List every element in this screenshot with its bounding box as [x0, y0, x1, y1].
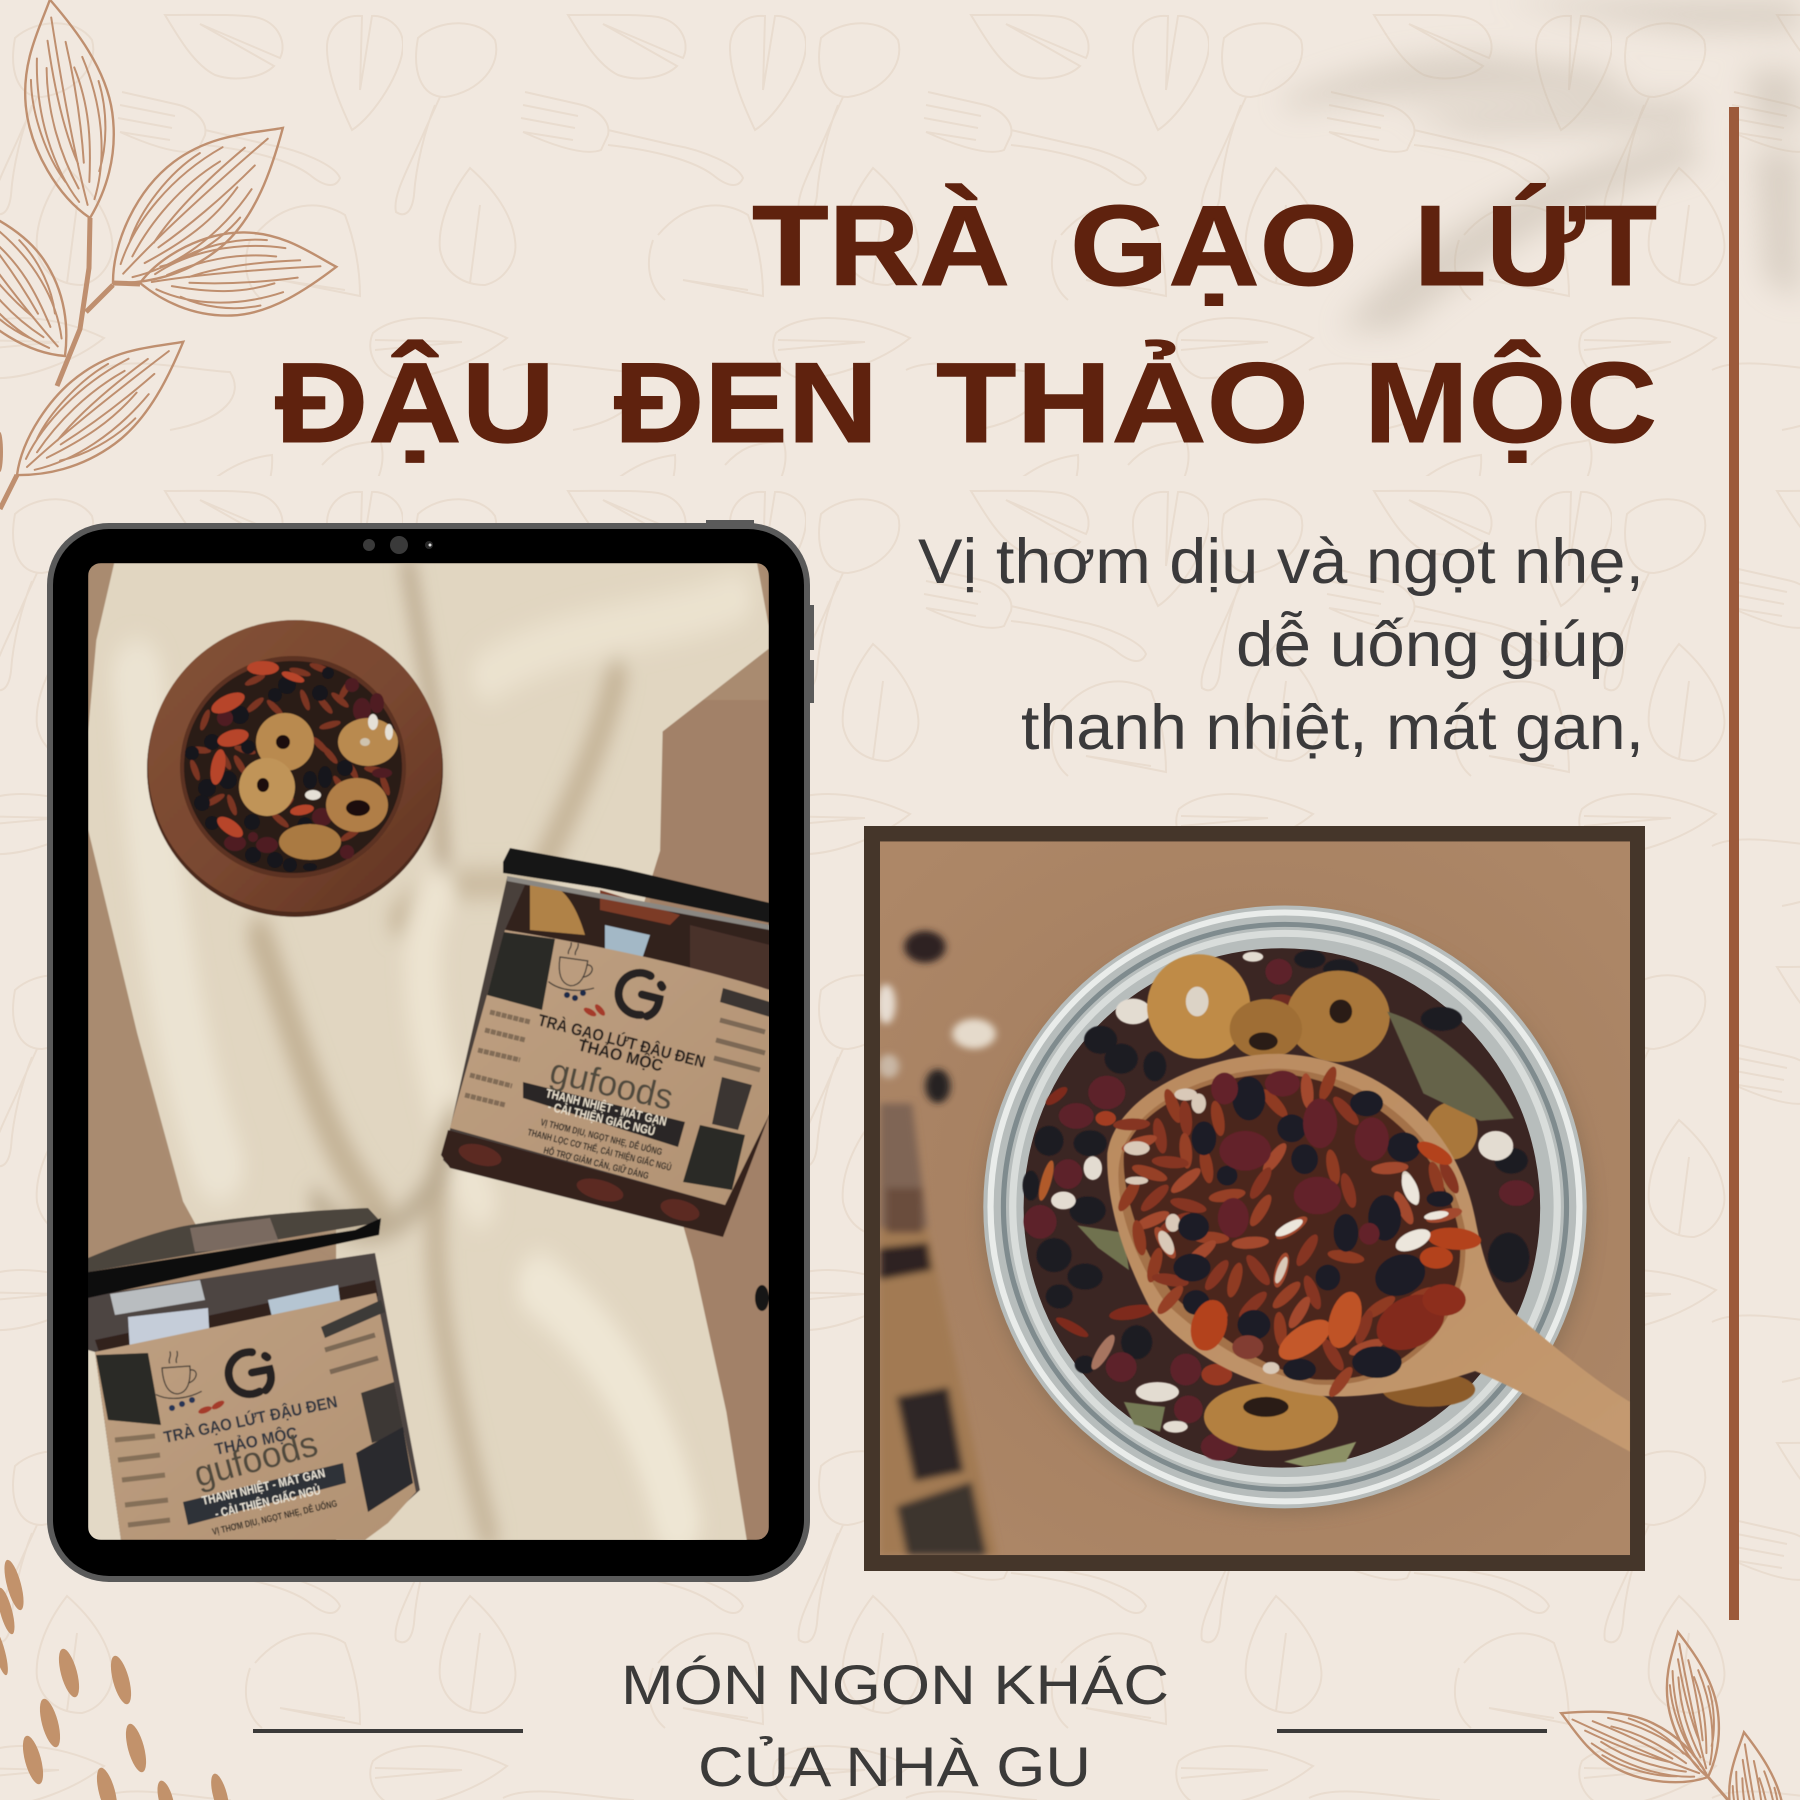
dried jujube slices [1147, 954, 1478, 1451]
footer heading: CỦA NHÀ GU [698, 1735, 1091, 1798]
title: LỨT [1414, 183, 1657, 310]
jar upper right: THẢO MỘC [576, 1035, 665, 1076]
jar lower left: gufoods [189, 1423, 322, 1495]
title: TRÀ [752, 183, 1010, 310]
jar upper right: - CẢI THIỆN GIẤC NGỦ [546, 1098, 657, 1139]
wooden bowl [147, 620, 443, 917]
blurred props left [877, 931, 997, 1555]
title: ĐẬU [275, 340, 555, 467]
shadow of leaves top right [1280, 0, 1800, 330]
vertical accent line [1729, 107, 1739, 1620]
description text: Vị thơm dịu và ngọt nhẹ, [918, 527, 1644, 597]
jar lower left: VỊ THƠM DỊU, NGỌT NHẸ, DỄ UỐNG [211, 1497, 338, 1538]
tablet side buttons [706, 520, 814, 703]
tablet mockup with product photo [47, 520, 814, 1582]
jar upper right: THANH NHIỆT - MÁT GAN [544, 1085, 668, 1129]
jar lower left: - CẢI THIỆN GIẤC NGỦ [213, 1482, 322, 1521]
leaf branch bottom right [1550, 1627, 1795, 1800]
footer heading: MÓN NGON KHÁC [621, 1653, 1169, 1716]
jar upper right: TRÀ GẠO LỨT ĐẬU ĐEN [536, 1010, 707, 1072]
jar lower left: TRÀ GẠO LỨT ĐẬU ĐEN [162, 1392, 339, 1447]
title: THẢO [936, 340, 1309, 467]
jar upper right: THANH LỌC CƠ THỂ, CẢI THIỆN GIẤC NGỦ [526, 1126, 673, 1174]
footer right divider [1277, 1729, 1547, 1733]
framed photo of spoon over jar [864, 826, 1645, 1571]
jar upper right: VỊ THƠM DỊU, NGỌT NHẸ, DỄ UỐNG [539, 1116, 663, 1158]
footer left divider [253, 1729, 523, 1733]
jar contents [1023, 950, 1534, 1467]
tablet screen photo: cloth, bowl and jars [88, 563, 770, 1540]
footer heading [621, 1653, 1169, 1798]
cloth [88, 563, 769, 1540]
wooden spoon [1107, 1054, 1630, 1452]
title [275, 183, 1657, 467]
dried herb leaves [1387, 1011, 1514, 1121]
leaf branch top left [0, 0, 340, 509]
description text: dễ uống giúp [1236, 610, 1626, 680]
title: ĐEN [614, 340, 878, 467]
jar lower left: THANH NHIỆT - MÁT GAN [200, 1465, 326, 1508]
jar upper right [441, 848, 770, 1237]
jar lower left: THẢO MỘC [213, 1423, 299, 1459]
jar upper right: HỖ TRỢ GIẢM CÂN, GIỮ DÁNG [542, 1144, 650, 1182]
jar upper right: gufoods [546, 1050, 677, 1118]
rice in bowl [188, 661, 392, 843]
metal jar rim [980, 1056, 1594, 1516]
title: MỘC [1364, 340, 1657, 467]
title: GẠO [1070, 183, 1358, 310]
description text: thanh nhiệt, mát gan, [1021, 693, 1644, 763]
jar lower left [88, 1208, 420, 1540]
description text [918, 527, 1644, 763]
rice grain decoration bottom left [0, 1558, 232, 1800]
